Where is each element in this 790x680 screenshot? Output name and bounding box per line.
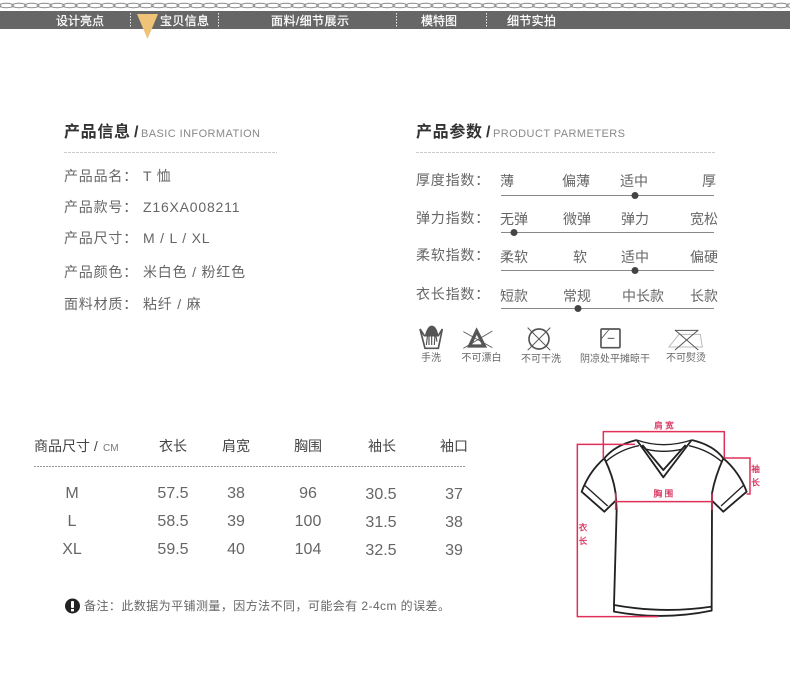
icon: no dry clean: 不可干洗 [521,353,561,365]
measurement labels: 长 [751,476,760,487]
softness scale: 偏硬 [690,249,718,265]
icon: hand wash [420,326,442,364]
size table [34,438,468,559]
measurement labels: 肩 宽 [654,419,674,430]
row: XL: XL [62,541,82,558]
row: L: L [68,513,77,530]
row: M: 37 [445,486,463,503]
softness scale: 柔软 [500,249,528,265]
measurement labels: 胸 围 [653,487,673,498]
row: L: 58.5 [157,513,189,530]
product colours: 米白色 / 粉红色 [143,264,246,280]
heading: product parameters: / [486,124,491,141]
table header: 肩宽 [222,438,250,454]
row: L: 39 [227,513,245,530]
elasticity scale: 弹力指数： [416,210,490,226]
table header: 商品尺寸 / [34,438,98,454]
care instructions [420,326,706,365]
row: XL: 59.5 [157,541,189,558]
product code: Z16XA008211 [143,199,240,215]
heading: basic information [64,122,260,141]
thickness scale [416,172,716,199]
heading: product parameters [416,122,625,141]
product colours: 产品颜色： [64,264,138,280]
icon: exclamation [65,598,80,614]
diagram: t-shirt measurements [577,419,760,617]
product sizes: M / L / XL [143,230,210,246]
row: L [68,513,463,531]
row: M: M [65,485,79,502]
icon: hand wash: 手洗 [421,351,441,364]
length scale: 长款 [690,288,718,304]
nav separators [130,13,486,28]
softness scale [416,247,718,274]
softness scale: 软 [573,249,587,265]
navigation bar [0,2,790,39]
table header: 袖口 [440,438,468,454]
length scale: 衣长指数： [416,286,490,302]
table header: 胸围 [294,438,322,454]
table header: 衣长 [159,438,187,454]
row: XL: 40 [227,541,245,558]
product code [64,199,240,215]
table header: CM [103,443,119,454]
row: XL: 32.5 [365,542,397,559]
product colours [64,264,246,280]
elasticity scale: 无弹 [500,211,528,227]
product sizes: 产品尺寸： [64,230,138,246]
nav items: 模特图 [421,13,457,28]
thickness scale: 厚 [702,173,716,189]
row: L: 38 [445,514,463,531]
table header: 袖长 [368,438,396,454]
heading: basic information: BASIC INFORMATION [141,128,260,140]
heading: basic information: / [134,124,139,141]
product name [64,168,172,184]
nav items: 设计亮点 [56,13,104,28]
thickness scale: 厚度指数： [416,172,490,188]
row: XL: 39 [445,542,463,559]
length scale [416,286,718,312]
note: 备注：此数据为平铺测量，因方法不同，可能会有 2-4cm 的误差。 [84,598,450,613]
elasticity scale: 宽松 [690,211,718,227]
icon: no bleach: 不可漂白 [462,351,502,364]
softness scale: 适中 [621,249,649,265]
measurement lines [577,432,750,617]
t-shirt outline [582,440,747,616]
row: M [65,485,463,503]
heading: basic information: 产品信息 [64,122,130,141]
icon: do not iron [666,330,706,364]
nav items [56,13,556,28]
icon: no bleach [462,331,502,364]
product name: T 恤 [143,168,172,184]
measurement labels: 长 [579,535,588,546]
row: M: 96 [299,485,317,502]
thickness scale: 薄 [500,173,514,189]
nav items: 面料/细节展示 [271,14,349,28]
measurement labels: 衣 [579,522,588,533]
decorative chain border [0,2,790,9]
row: XL [62,541,463,559]
elasticity scale [416,210,718,236]
table header [34,438,468,454]
icon: dry flat in shade: 阴凉处平摊晾干 [580,352,650,365]
elasticity scale: 弹力 [621,211,649,227]
icon: no dry clean [521,328,561,365]
length scale: 中长款 [622,288,664,304]
row: XL: 104 [295,541,321,558]
measurement labels: 袖 [751,463,760,474]
heading: product parameters: 产品参数 [416,122,482,141]
length scale: 短款 [500,288,528,304]
nav background [0,11,790,29]
panel: basic information [64,122,277,312]
fabric material [64,296,201,312]
heading: product parameters: PRODUCT PARMETERS [493,128,625,140]
row: M: 57.5 [157,485,189,502]
softness scale: 柔软指数： [416,247,490,263]
product sizes [64,230,210,246]
row: L: 100 [295,513,321,530]
fabric material: 粘纤 / 麻 [143,296,201,312]
row: L: 31.5 [365,514,397,531]
product code: 产品款号： [64,199,138,215]
product name: 产品品名： [64,168,138,184]
length scale: 常规 [563,288,591,304]
icon: do not iron: 不可熨烫 [666,351,706,364]
panel: product parameters [416,122,718,312]
active tab marker [137,14,158,39]
fabric material: 面料材质： [64,296,138,312]
row: M: 38 [227,485,245,502]
elasticity scale: 微弹 [563,211,591,227]
icon: dry flat in shade [580,329,650,365]
thickness scale: 适中 [620,173,648,189]
row: M: 30.5 [365,486,397,503]
thickness scale: 偏薄 [562,173,590,189]
nav items: 细节实拍 [507,13,556,28]
measurement labels [579,419,760,546]
nav items: 宝贝信息 [160,13,209,28]
